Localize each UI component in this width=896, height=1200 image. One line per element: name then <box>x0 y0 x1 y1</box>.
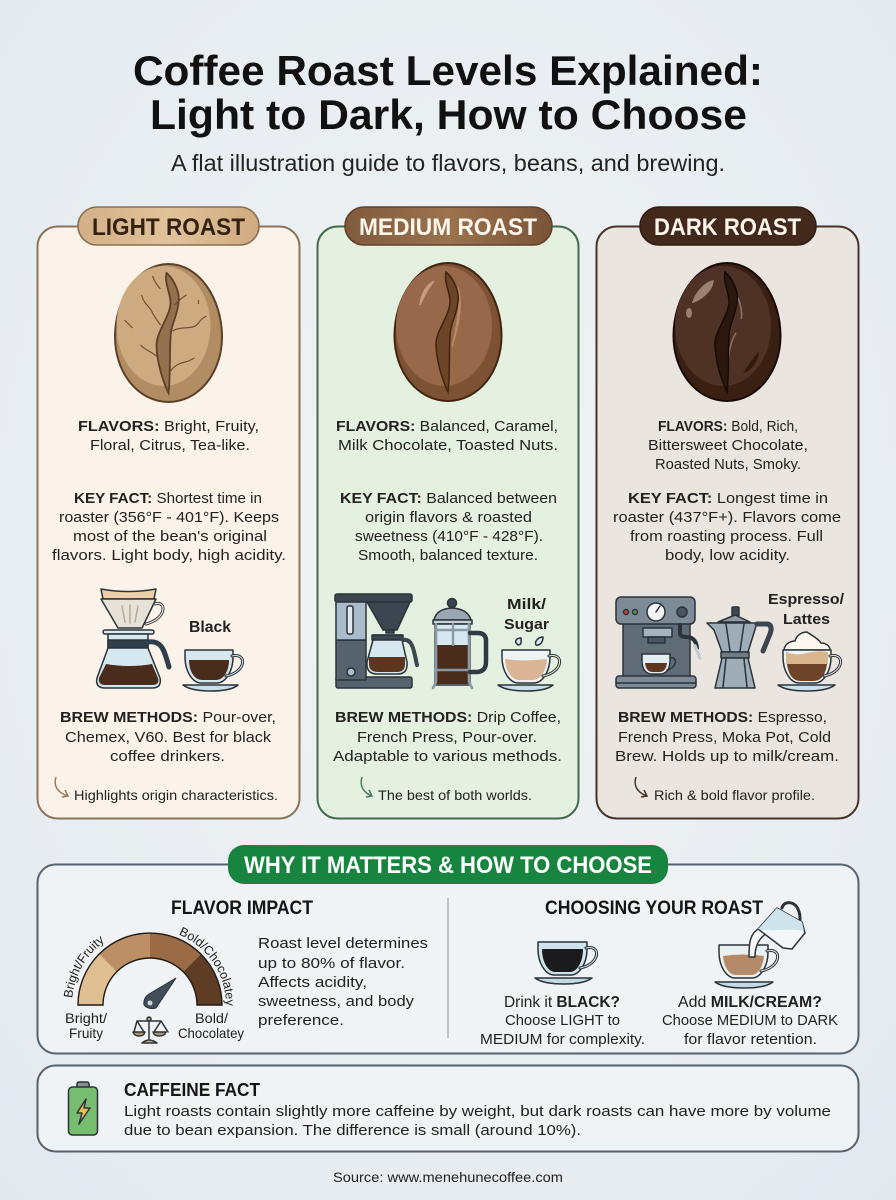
icon: dark coffee bean <box>674 263 780 401</box>
subtitle: A flat illustration guide to flavors, beans, and brewing. <box>171 150 725 176</box>
label: milk and sugar <box>504 596 549 633</box>
text: dark brew methods: BREW METHODS: Espresso, <box>618 709 827 726</box>
text: light brew methods: Chemex, V60. Best for black <box>65 729 272 746</box>
text: light brew methods: BREW METHODS: Pour-over, <box>60 709 276 726</box>
text: dark flavors: FLAVORS: Bold, Rich, <box>658 418 798 435</box>
arrow: dark note <box>635 777 647 797</box>
panel: caffeine fact <box>38 1066 858 1152</box>
panel: dark roast <box>596 207 858 818</box>
text: drink it black: Drink it BLACK? <box>504 994 620 1011</box>
text: add milk or cream: Add MILK/CREAM? <box>678 994 822 1011</box>
badge: light roast: LIGHT ROAST <box>92 214 245 241</box>
icon: balance scale <box>133 1017 168 1043</box>
gauge labels: Bold/ <box>195 1010 228 1026</box>
text: light key fact: flavors. Light body, high acidity. <box>52 547 286 564</box>
badge: light roast <box>78 207 259 245</box>
text: dark key fact: KEY FACT: Longest time in <box>628 490 828 507</box>
text: dark brew methods: Brew. Holds up to milk/cream. <box>615 748 839 765</box>
arrow: medium note <box>361 777 372 797</box>
icon: milk coffee cup <box>498 637 560 691</box>
text: light key fact <box>52 490 286 564</box>
icon: black coffee <box>535 942 597 984</box>
note: light roast: Highlights origin characteristics. <box>74 787 278 803</box>
text: caffeine fact: Light roasts contain slightly more caffeine by weight, but dark roasts can have more by volume <box>124 1103 831 1120</box>
panel: light roast <box>38 207 300 818</box>
banner: why it matters <box>228 845 668 884</box>
text: dark flavors: Roasted Nuts, Smoky. <box>655 456 801 473</box>
icon: milk pouring into cup <box>715 903 805 988</box>
text: dark key fact: from roasting process. Full <box>630 528 823 545</box>
text: flavor impact description: sweetness, and body <box>258 993 415 1010</box>
source: Source: www.menehunecoffee.com <box>333 1169 563 1185</box>
badge: medium roast: MEDIUM ROAST <box>359 214 537 241</box>
text: dark brew methods: French Press, Moka Pot, Cold <box>618 729 831 746</box>
gauge labels <box>65 1010 244 1041</box>
text: add milk or cream <box>662 994 838 1048</box>
text: medium flavors: FLAVORS: Balanced, Caramel, <box>336 418 558 435</box>
title: Light to Dark, How to Choose <box>150 91 747 138</box>
gauge labels: Fruity <box>69 1025 103 1041</box>
icon: pour-over dripper and carafe <box>97 589 169 688</box>
note: dark roast: Rich & bold flavor profile. <box>654 787 815 803</box>
text: caffeine fact: due to bean expansion. The difference is small (around 10%). <box>124 1122 581 1139</box>
icon: moka pot <box>707 607 771 688</box>
icon: battery <box>68 1082 98 1135</box>
icon: espresso machine <box>616 597 700 688</box>
text: add milk or cream: Choose MEDIUM to DARK <box>662 1012 838 1029</box>
label: espresso and lattes <box>768 591 845 628</box>
icon: latte cup <box>778 632 841 691</box>
text: dark flavors: Bittersweet Chocolate, <box>648 437 808 454</box>
icon: light coffee bean <box>115 264 222 402</box>
text: flavor impact description: up to 80% of flavor. <box>258 955 405 972</box>
banner: why it matters: WHY IT MATTERS & HOW TO CHOOSE <box>244 852 652 879</box>
text: light flavors: Floral, Citrus, Tea-like. <box>90 437 250 454</box>
icon: french press <box>433 598 486 688</box>
text: medium key fact: KEY FACT: Balanced between <box>340 490 557 507</box>
text: light key fact: KEY FACT: Shortest time in <box>74 490 262 507</box>
text: dark brew methods <box>615 709 839 765</box>
heading: choosing your roast: CHOOSING YOUR ROAST <box>545 898 763 919</box>
gauge labels: Chocolatey <box>178 1025 244 1041</box>
label: espresso and lattes: Lattes <box>783 611 830 628</box>
text: light brew methods <box>60 709 276 765</box>
icon: medium coffee bean <box>394 263 502 401</box>
note: medium roast: The best of both worlds. <box>378 787 532 803</box>
text: dark key fact: roaster (437°F+). Flavors come <box>613 509 841 526</box>
chart: roast flavor gauge: Bright/Fruity <box>64 936 103 998</box>
text: add milk or cream: for flavor retention. <box>684 1031 817 1048</box>
text: flavor impact description <box>258 935 428 1029</box>
title <box>133 47 763 138</box>
text: flavor impact description: Affects acidity, <box>258 974 367 991</box>
text: drink it black: Choose LIGHT to <box>505 1012 620 1029</box>
text: drink it black: MEDIUM for complexity. <box>480 1031 645 1048</box>
text: light flavors: FLAVORS: Bright, Fruity, <box>78 418 259 435</box>
chart: roast flavor gauge <box>64 927 233 1010</box>
text: light brew methods: coffee drinkers. <box>110 748 225 765</box>
heading: flavor impact: FLAVOR IMPACT <box>171 898 313 919</box>
text: light flavors <box>78 418 259 454</box>
text: medium key fact: origin flavors & roasted <box>365 509 532 526</box>
badge: dark roast: DARK ROAST <box>654 214 801 241</box>
gauge labels: Bright/ <box>65 1010 107 1026</box>
text: medium brew methods: BREW METHODS: Drip Coffee, <box>335 709 561 726</box>
text: dark key fact: body, low acidity. <box>665 547 790 564</box>
panel: why it matters <box>36 845 860 1054</box>
badge: medium roast <box>345 207 552 245</box>
icon: drip coffee maker <box>335 594 417 688</box>
text: flavor impact description: Roast level determines <box>258 935 428 952</box>
text: dark flavors <box>648 418 808 473</box>
label: milk and sugar: Sugar <box>504 616 549 633</box>
text: medium brew methods: Adaptable to various methods. <box>333 748 562 765</box>
text: medium key fact: Smooth, balanced texture. <box>358 547 538 564</box>
badge: dark roast <box>640 207 816 245</box>
title: Coffee Roast Levels Explained: <box>133 47 763 94</box>
text: medium flavors: Milk Chocolate, Toasted Nuts. <box>338 437 558 454</box>
text: light key fact: most of the bean's original <box>73 528 267 545</box>
chart: roast flavor gauge: Bold/Chocolatey <box>180 927 233 1006</box>
text: medium brew methods: French Press, Pour-over. <box>357 729 537 746</box>
text: light key fact: roaster (356°F - 401°F). Keeps <box>59 509 279 526</box>
label: milk and sugar: Milk/ <box>507 596 547 613</box>
text: medium flavors <box>336 418 558 454</box>
text: caffeine fact: CAFFEINE FACT <box>124 1080 260 1100</box>
text: caffeine fact <box>124 1080 831 1139</box>
text: drink it black <box>480 994 645 1048</box>
text: dark key fact <box>613 490 841 564</box>
label: espresso and lattes: Espresso/ <box>768 591 845 608</box>
text: medium brew methods <box>333 709 562 765</box>
text: medium key fact: sweetness (410°F - 428°F). <box>355 528 543 545</box>
text: medium key fact <box>340 490 557 564</box>
divider <box>447 898 449 1038</box>
arrow: light note <box>55 777 68 797</box>
icon: black coffee cup <box>183 650 243 691</box>
label: black: Black <box>189 619 231 636</box>
panel: medium roast <box>318 207 578 818</box>
text: flavor impact description: preference. <box>258 1012 344 1029</box>
